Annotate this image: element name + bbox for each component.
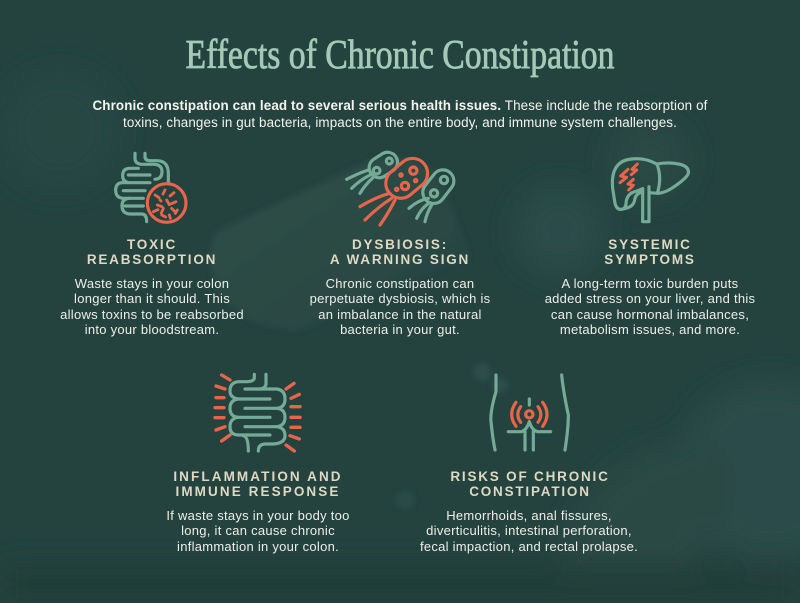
heading: systemic symptoms: SYSTEMIC [608, 237, 692, 252]
heading: dysbiosis: DYSBIOSIS: [352, 237, 448, 252]
text: toxic reabsorption [60, 276, 244, 337]
text: systemic symptoms [545, 276, 755, 337]
text: dysbiosis [310, 276, 490, 337]
heading: inflammation and immune response [173, 469, 343, 499]
heading: inflammation and immune response: INFLAMMATION AND [173, 469, 343, 484]
text: inflammation: If waste stays in your body too [166, 508, 350, 523]
text: dysbiosis: an imbalance in the natural [318, 307, 482, 322]
text: inflammation: long, it can cause chronic [181, 523, 335, 538]
icon: liver [610, 157, 690, 224]
text: toxic reabsorption: Waste stays in your colon [75, 276, 229, 291]
text: toxic reabsorption: allows toxins to be reabsorbed [60, 307, 244, 322]
text: risks: Hemorrhoids, anal fissures, [446, 508, 612, 523]
heading: toxic reabsorption: TOXIC [127, 237, 177, 252]
text: risks: fecal impaction, and rectal prolapse. [420, 539, 638, 554]
heading: dysbiosis [330, 237, 470, 267]
text: systemic symptoms: A long-term toxic burden puts [562, 276, 738, 291]
heading: systemic symptoms [604, 237, 696, 267]
text: risks [420, 508, 638, 554]
heading: toxic reabsorption: REABSORPTION [87, 252, 217, 267]
heading: toxic reabsorption [87, 237, 217, 267]
text: dysbiosis: bacteria in your gut. [340, 322, 460, 337]
heading: risks [450, 469, 610, 499]
heading: risks: RISKS OF CHRONIC [450, 469, 610, 484]
icon: intestine with bacteria [114, 152, 188, 224]
text: toxic reabsorption: into your bloodstream. [85, 322, 219, 337]
heading: systemic symptoms: SYMPTOMS [604, 252, 696, 267]
text: inflammation [166, 508, 350, 554]
intro text [93, 98, 708, 130]
icon: three bacteria [345, 150, 456, 227]
heading: risks: CONSTIPATION [469, 484, 591, 499]
icon: inflamed intestine [213, 372, 302, 453]
text: dysbiosis: perpetuate dysbiosis, which is [310, 291, 490, 306]
text: systemic symptoms: can cause hormonal imbalances, [551, 307, 749, 322]
intro text: Chronic constipation can lead to several serious health issues. These include the reabsorption of [93, 98, 707, 113]
text: systemic symptoms: metabolism issues, and more. [560, 322, 740, 337]
heading: inflammation and immune response: IMMUNE RESPONSE [175, 484, 341, 499]
icon: pelvis with pain signal [489, 373, 570, 452]
text: toxic reabsorption: longer than it should. This [74, 291, 230, 306]
heading: dysbiosis: A WARNING SIGN [330, 252, 470, 267]
intro text: toxins, changes in gut bacteria, impacts on the entire body, and immune system challenges. [123, 115, 677, 130]
title: Effects of Chronic Constipation [185, 31, 615, 77]
text: dysbiosis: Chronic constipation can [326, 276, 474, 291]
text: risks: diverticulitis, intestinal perforation, [426, 523, 632, 538]
text: inflammation: inflammation in your colon. [177, 539, 339, 554]
text: systemic symptoms: added stress on your liver, and this [545, 291, 755, 306]
